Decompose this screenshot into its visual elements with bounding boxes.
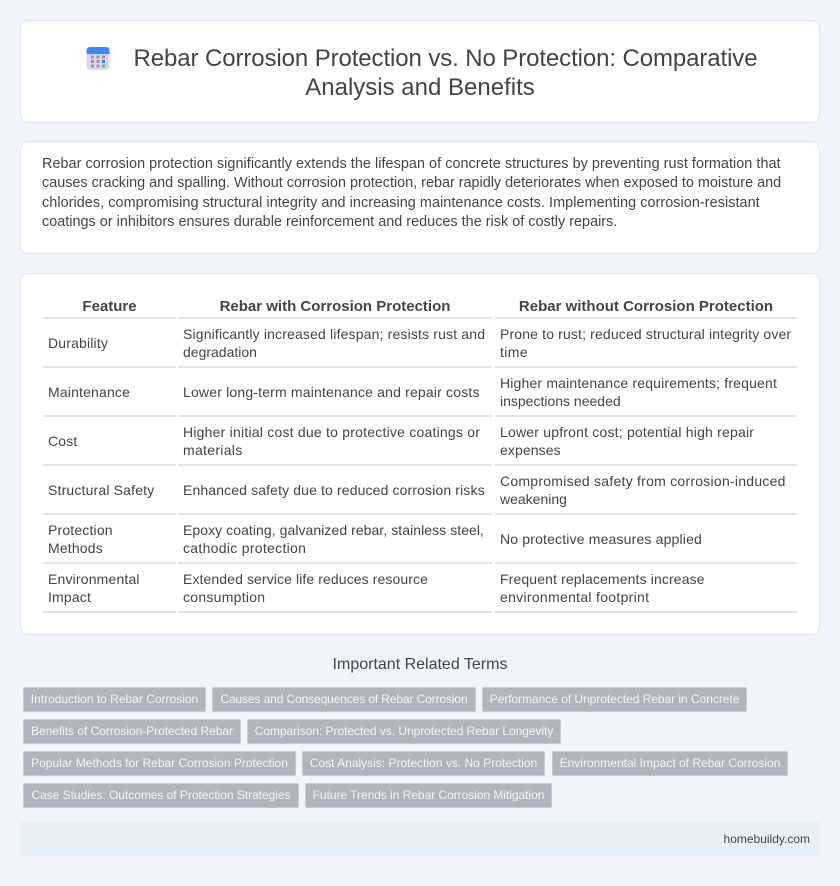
row: durability: Prone to rust; reduced structural integrity over [500, 326, 791, 342]
title: Rebar Corrosion Protection vs. No Protection: Comparative [134, 45, 757, 72]
intro text: coatings or inhibitors ensures durable reinforcement and reduces the risk of costly repairs. [42, 214, 617, 230]
related terms tags [23, 687, 788, 808]
row: structural safety: Structural Safety [48, 482, 154, 498]
row: maintenance: Higher maintenance requirements; frequent [500, 375, 777, 391]
related terms tags: Benefits of Corrosion-Protected Rebar [31, 724, 233, 738]
row: environmental impact: Environmental [48, 571, 140, 587]
row: protection methods: Protection [48, 522, 113, 538]
footer text: homebuildy.com [724, 832, 810, 846]
intro text [42, 156, 781, 230]
row: durability: Significantly increased lifespan; resists rust and [183, 326, 485, 342]
row: cost: Cost [48, 433, 77, 449]
row: environmental impact: Extended service life reduces resource [183, 571, 428, 587]
title [134, 45, 757, 101]
title: Analysis and Benefits [305, 74, 535, 101]
row: environmental impact: consumption [183, 589, 265, 605]
table header: without protection: Rebar without Corrosion Protection [519, 298, 773, 315]
row: structural safety: weakening [500, 491, 567, 507]
row: cost: Lower upfront cost; potential high repair [500, 424, 754, 440]
comparison table [43, 317, 797, 613]
icon: calendar [86, 47, 110, 70]
header panel [20, 20, 820, 123]
table panel [20, 273, 820, 635]
row: durability: Durability [48, 335, 108, 351]
related terms tags: Causes and Consequences of Rebar Corrosion [220, 692, 468, 706]
related terms tags: Environmental Impact of Rebar Corrosion [560, 756, 780, 770]
related terms tags: Cost Analysis: Protection vs. No Protection [310, 756, 537, 770]
intro text: chlorides, compromising structural integrity and increasing maintenance costs. Implementing corrosion-resistant [42, 195, 760, 211]
row: maintenance: Maintenance [48, 384, 130, 400]
row: durability: time [500, 344, 528, 360]
row: cost: Higher initial cost due to protective coatings or [183, 424, 480, 440]
related terms tags: Introduction to Rebar Corrosion [31, 692, 198, 706]
row: durability [48, 326, 791, 360]
row: cost [48, 424, 754, 458]
row: protection methods: Methods [48, 540, 103, 556]
row: structural safety: Enhanced safety due to reduced corrosion risks [183, 482, 485, 498]
row: environmental impact: environmental footprint [500, 589, 649, 605]
row: maintenance [48, 375, 777, 409]
related terms tags: Case Studies: Outcomes of Protection Strategies [32, 788, 290, 802]
intro text: Rebar corrosion protection significantly extends the lifespan of concrete structures by preventing rust formation that [42, 156, 781, 172]
row: maintenance: Lower long-term maintenance and repair costs [183, 384, 480, 400]
related terms tags: Popular Methods for Rebar Corrosion Protection [31, 756, 288, 770]
related terms tags: Performance of Unprotected Rebar in Concrete [490, 692, 739, 706]
table header: with protection: Rebar with Corrosion Protection [220, 298, 450, 315]
related terms tags: Comparison: Protected vs. Unprotected Rebar Longevity [255, 724, 553, 738]
row: structural safety: Compromised safety from corrosion-induced [500, 473, 786, 489]
related terms heading: Important Related Terms [333, 656, 507, 673]
row: protection methods: cathodic protection [183, 540, 306, 556]
row: protection methods: No protective measures applied [500, 531, 702, 547]
row: environmental impact: Impact [48, 589, 91, 605]
related terms tags: Future Trends in Rebar Corrosion Mitigation [313, 788, 544, 802]
intro panel [20, 141, 820, 254]
table header: feature: Feature [82, 298, 137, 315]
row: cost: expenses [500, 442, 561, 458]
row: protection methods [48, 522, 702, 556]
footer bar [20, 822, 820, 856]
row: protection methods: Epoxy coating, galvanized rebar, stainless steel, [183, 522, 484, 538]
row: environmental impact [48, 571, 705, 605]
row: environmental impact: Frequent replacements increase [500, 571, 705, 587]
row: cost: materials [183, 442, 242, 458]
row: maintenance: inspections needed [500, 393, 621, 409]
row: structural safety [48, 473, 786, 507]
row: durability: degradation [183, 344, 257, 360]
intro text: causes cracking and spalling. Without corrosion protection, rebar rapidly deteriorates when exposed to moisture and [42, 175, 781, 191]
